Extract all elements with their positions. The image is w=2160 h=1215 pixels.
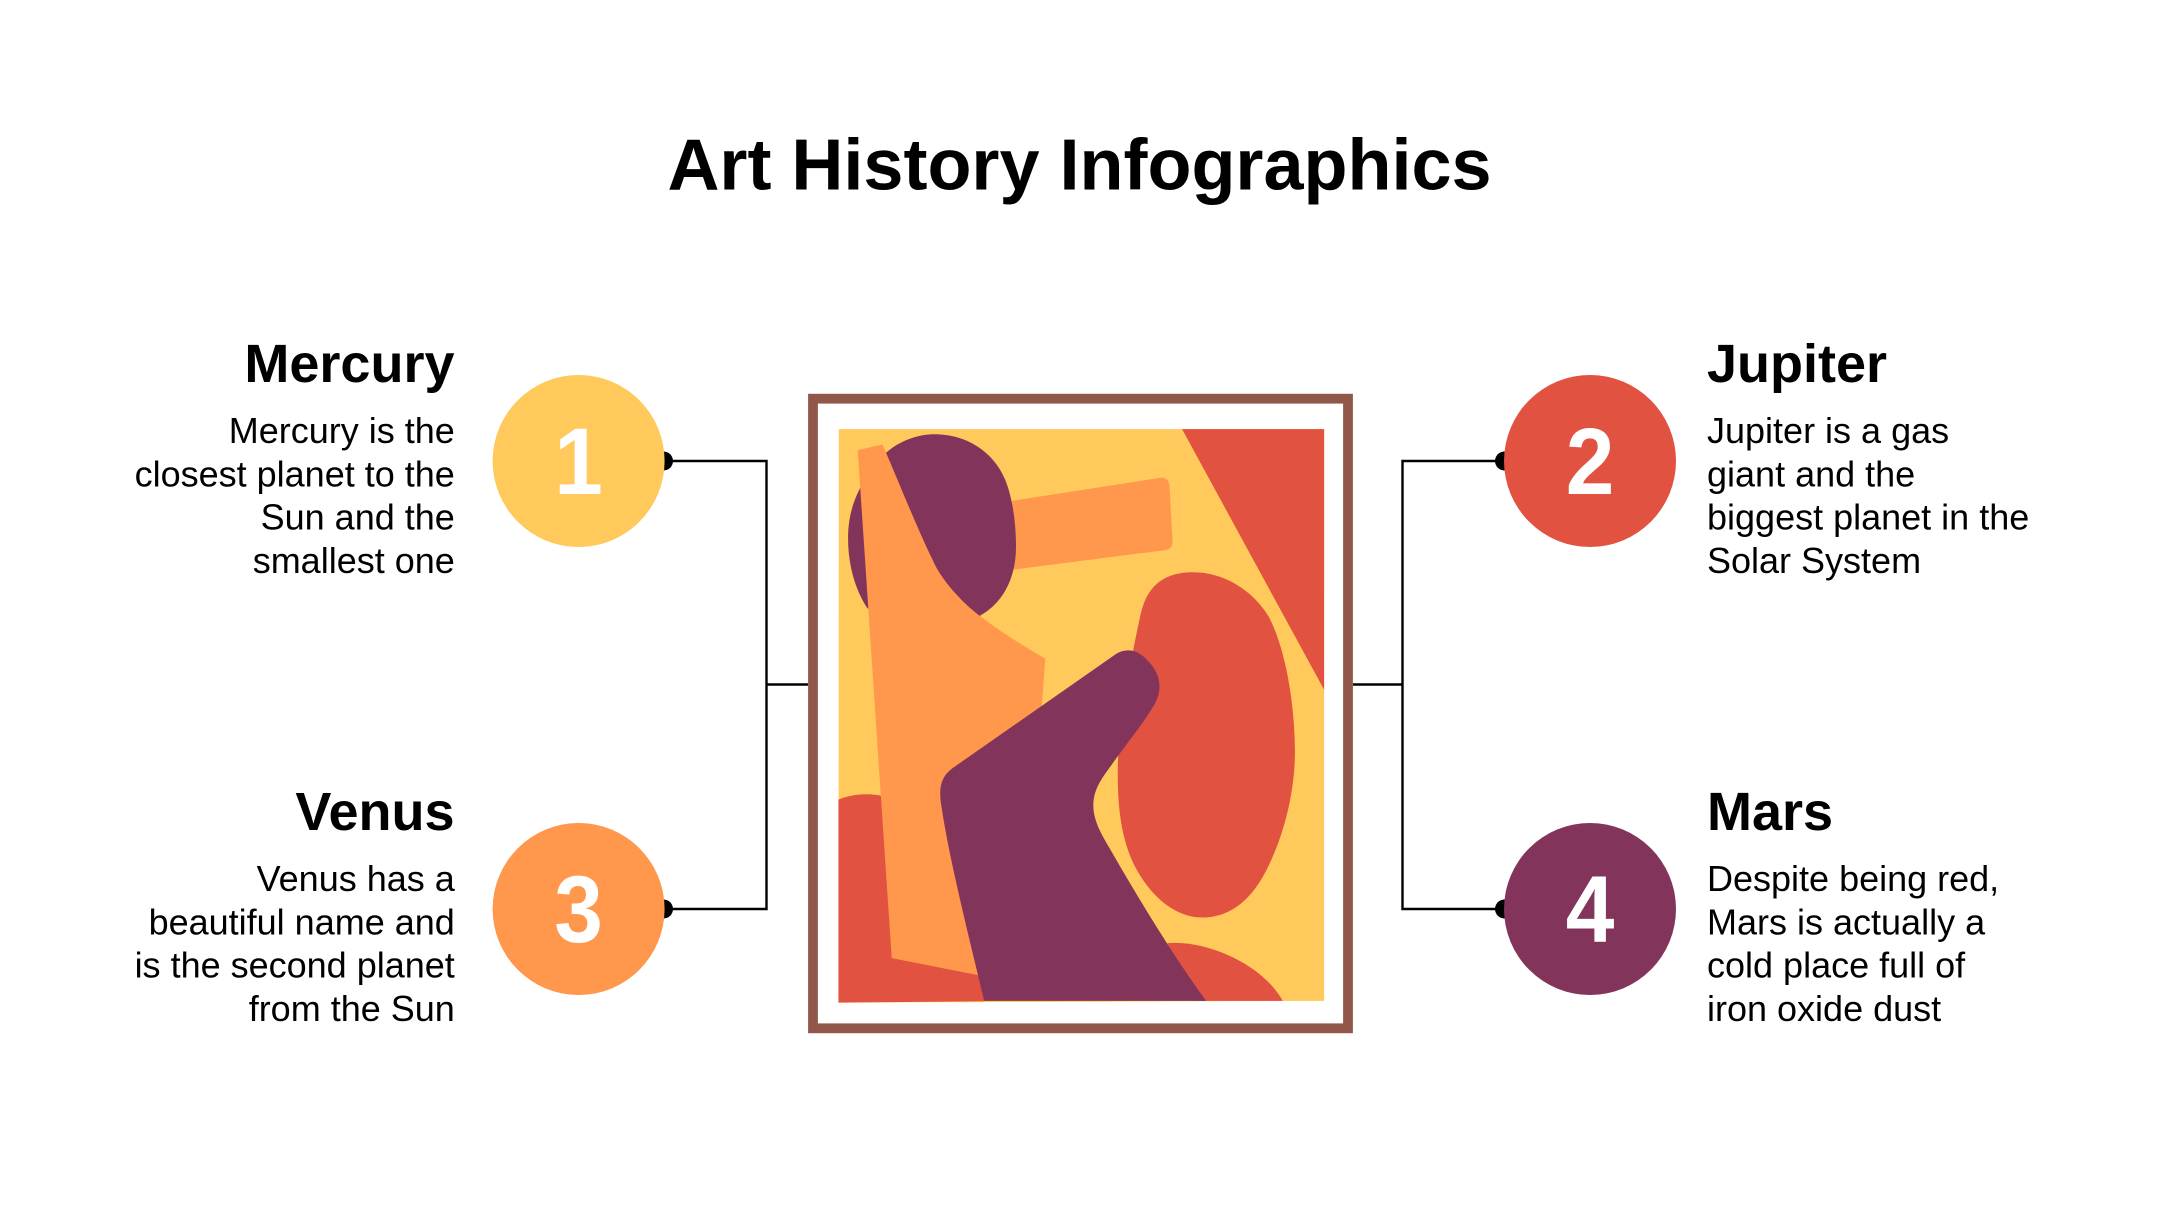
text: Mercury description — [135, 410, 455, 581]
number badge 1 — [493, 375, 665, 547]
picture frame — [813, 399, 1348, 1028]
text: Venus description: is the second planet — [135, 945, 455, 986]
text: Venus description: from the Sun — [249, 988, 455, 1029]
text: Mercury description: Sun and the — [261, 497, 455, 538]
connector dot 3 — [654, 900, 673, 918]
text: Jupiter description: Jupiter is a gas — [1707, 410, 1949, 451]
framed abstract painting — [813, 399, 1348, 1028]
text: Mars description: cold place full of — [1707, 945, 1966, 986]
heading: Mercury: Mercury — [244, 334, 454, 394]
number badge 3: 3 — [554, 857, 603, 963]
text: Mercury description: closest planet to the — [135, 453, 455, 494]
right connector lines — [1353, 461, 1505, 909]
number badge 4: 4 — [1566, 857, 1614, 963]
number badge 2: 2 — [1566, 409, 1614, 515]
abstract artwork — [838, 429, 1324, 1003]
panel: Mars — [1495, 782, 1999, 1029]
connector dot 2 — [1495, 452, 1514, 470]
text: Venus description: Venus has a — [257, 858, 456, 899]
connector dot 1 — [654, 452, 673, 470]
text: Venus description — [135, 858, 456, 1029]
connector dot 4 — [1495, 900, 1514, 918]
text: Jupiter description: Solar System — [1707, 540, 1921, 581]
number badge 2 — [1504, 375, 1676, 547]
text: Mars description — [1707, 858, 1999, 1029]
text: Mars description: iron oxide dust — [1707, 988, 1941, 1029]
number badge 4 — [1504, 823, 1676, 995]
text: Mars description: Despite being red, — [1707, 858, 1999, 899]
heading: Jupiter: Jupiter — [1707, 334, 1887, 394]
text: Mars description: Mars is actually a — [1707, 901, 1986, 942]
panel: Venus — [135, 782, 673, 1029]
heading: Venus: Venus — [295, 782, 454, 842]
panel: Jupiter — [1495, 334, 2029, 581]
number badge 3 — [493, 823, 665, 995]
panel: Mercury — [135, 334, 673, 581]
number badge 1: 1 — [554, 409, 603, 515]
heading: Mars: Mars — [1707, 782, 1833, 842]
text: Mercury description: smallest one — [253, 540, 455, 581]
title: Art History Infographics — [667, 126, 1492, 206]
text: Mercury description: Mercury is the — [229, 410, 455, 451]
text: Venus description: beautiful name and — [149, 901, 455, 942]
left connector lines — [664, 461, 808, 909]
text: Jupiter description — [1707, 410, 2029, 581]
text: Jupiter description: biggest planet in the — [1707, 497, 2029, 538]
text: Jupiter description: giant and the — [1707, 453, 1915, 494]
